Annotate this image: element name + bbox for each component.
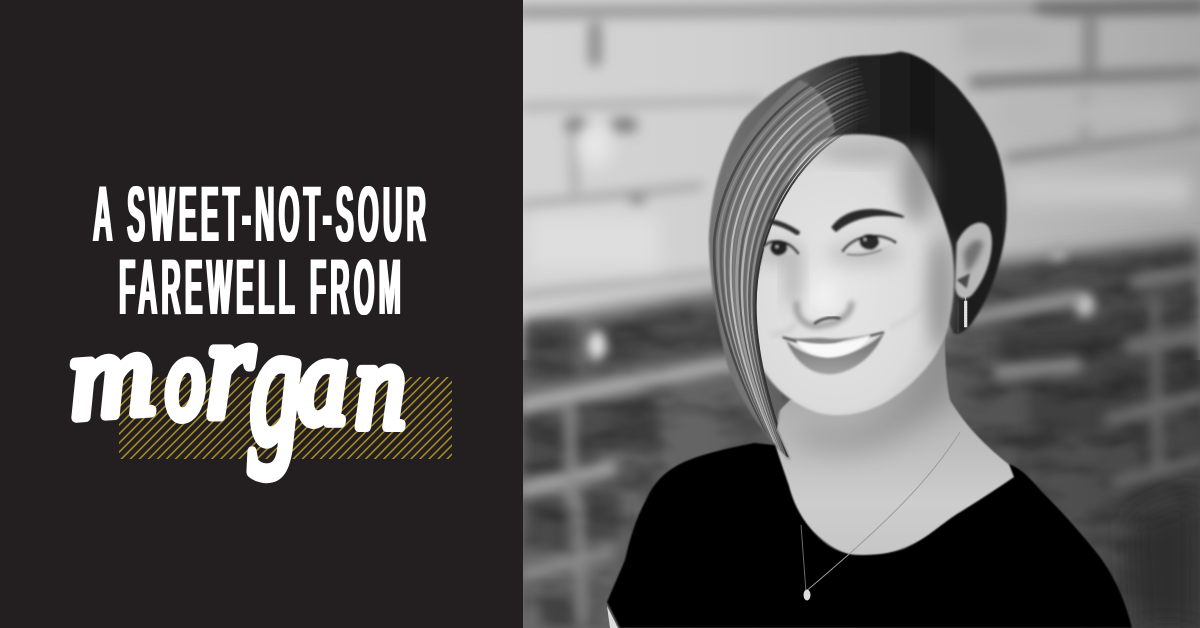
face shading — [757, 143, 953, 350]
signature: morgan: g — [250, 291, 301, 479]
right eye — [843, 234, 896, 255]
signature: morgan: o — [166, 314, 204, 443]
photo background: brick wall — [523, 0, 1200, 628]
hair back shape — [709, 52, 1007, 460]
panel: title block — [0, 0, 523, 628]
signature: morgan: r — [206, 288, 254, 447]
lower lip — [786, 333, 884, 374]
panel: portrait photo — [523, 0, 1200, 628]
neck under-chin shadow — [795, 340, 950, 451]
brick mottling — [523, 230, 1200, 628]
dark bricks — [525, 256, 1200, 628]
bright mortar spots — [588, 331, 606, 359]
portrait head — [709, 52, 1007, 460]
mouth — [782, 332, 884, 374]
dark lower brick zone — [523, 238, 1200, 628]
left eye — [764, 241, 798, 255]
face shape — [748, 134, 954, 415]
upper brick mortar lines — [523, 6, 1200, 295]
necklace — [801, 432, 960, 600]
bright spots on upper brick — [530, 20, 1190, 270]
teeth — [796, 336, 870, 358]
front hair fringe — [709, 80, 835, 460]
upper lip — [782, 332, 884, 345]
signature: morgan — [65, 288, 406, 479]
signature: morgan: m — [65, 305, 159, 444]
white sleeve gap — [607, 606, 618, 628]
right eyebrow — [833, 210, 903, 231]
hair strands — [714, 64, 873, 456]
dark lower right corner — [1130, 490, 1200, 628]
necklace pendant — [804, 590, 810, 600]
left eyebrow — [772, 222, 797, 233]
gold diagonal hatch block — [119, 377, 452, 459]
ear — [955, 223, 992, 298]
earring — [957, 292, 967, 332]
neck and chest skin — [770, 330, 1016, 558]
nose — [797, 303, 852, 326]
black shirt — [607, 443, 1132, 628]
light mortar bands — [523, 270, 1200, 622]
signature: morgan: n — [355, 317, 406, 454]
signature: morgan: a — [298, 313, 348, 450]
